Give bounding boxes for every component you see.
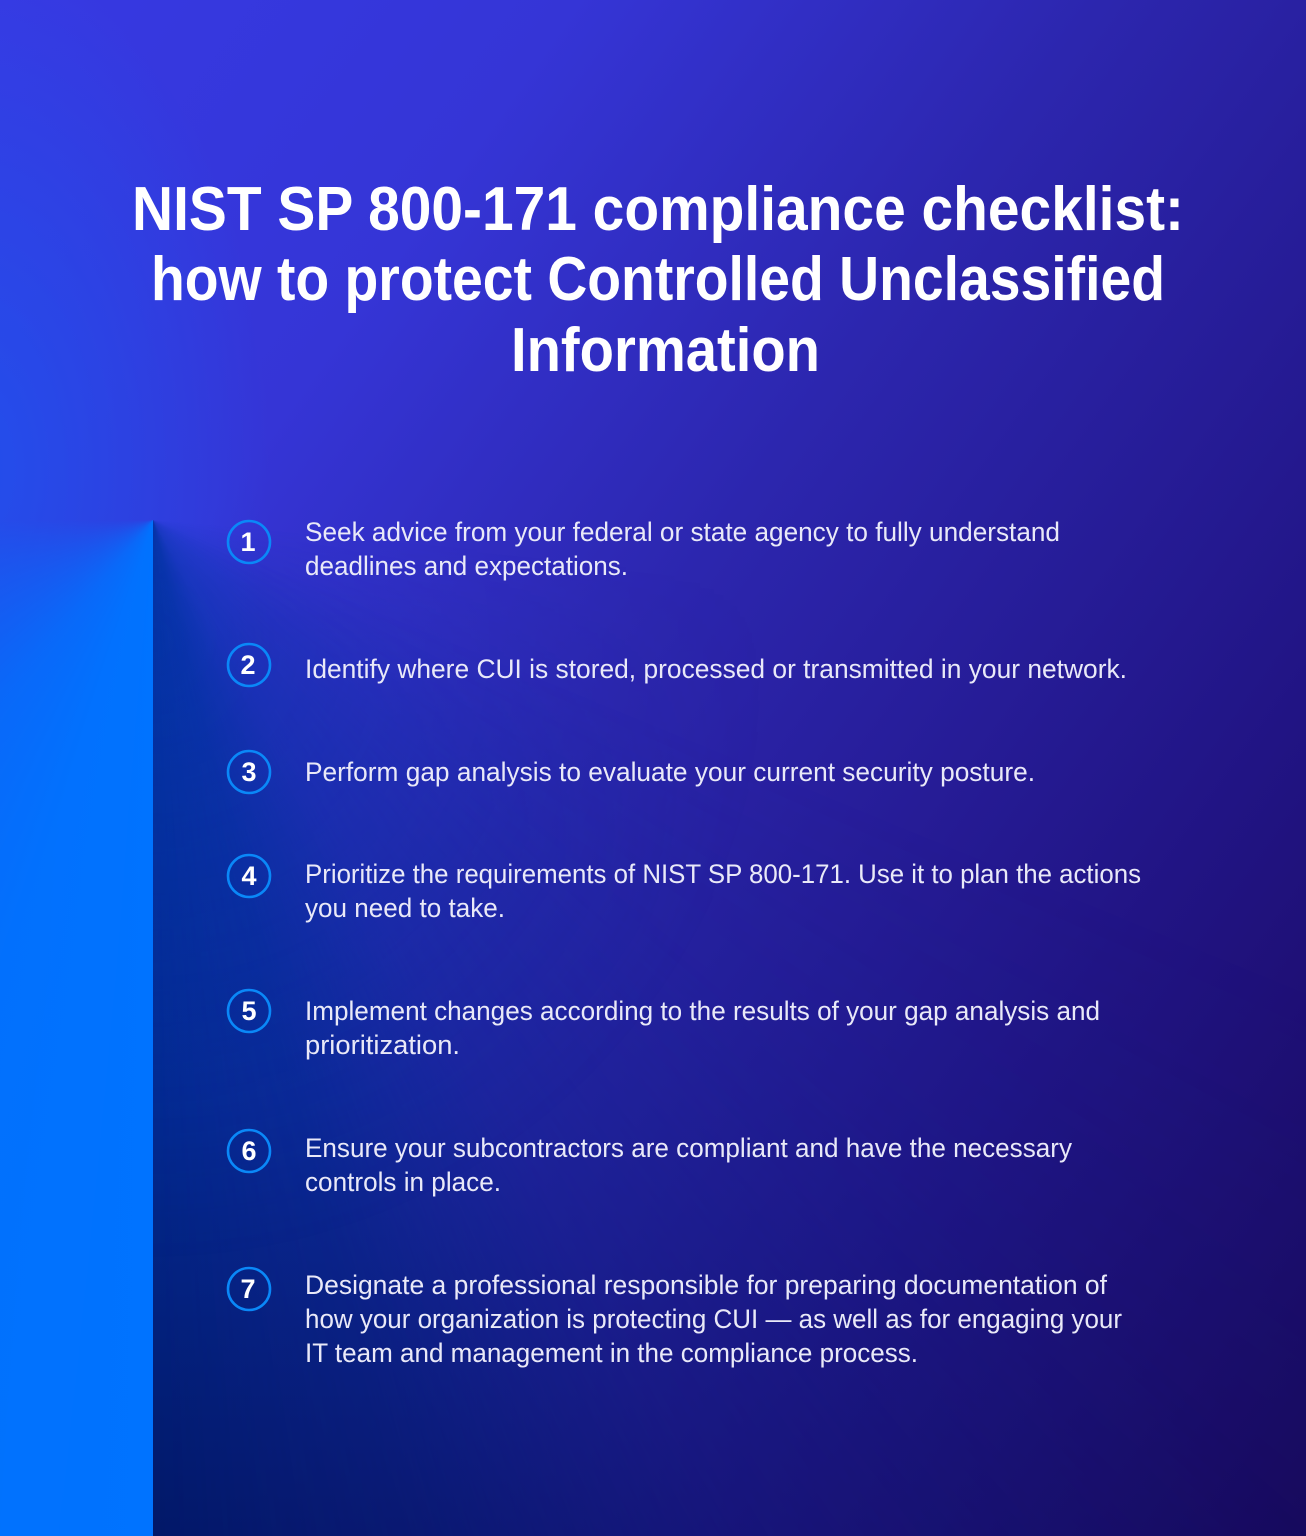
step 3: Perform gap analysis to evaluate your current security posture. xyxy=(305,757,1035,787)
step 6: Ensure your subcontractors are compliant and have the necessary xyxy=(305,1133,1073,1163)
step 2: 2 xyxy=(240,650,256,680)
step 4 xyxy=(228,855,1141,923)
step 4: Prioritize the requirements of NIST SP 800-171. Use it to plan the actions xyxy=(305,859,1141,889)
title: Information xyxy=(511,316,820,385)
step 3: 3 xyxy=(241,757,257,787)
step 7: IT team and management in the compliance process. xyxy=(305,1338,918,1368)
step 4: 4 xyxy=(241,861,257,891)
soft glow near the band corner xyxy=(153,520,368,720)
step 2: Identify where CUI is stored, processed or transmitted in your network. xyxy=(305,654,1127,684)
checklist xyxy=(228,517,1141,1368)
step 5: 5 xyxy=(241,996,257,1026)
step 7: 7 xyxy=(240,1274,256,1304)
step 7 xyxy=(228,1268,1122,1368)
step 1: deadlines and expectations. xyxy=(305,551,628,581)
title: NIST SP 800-171 compliance checklist: xyxy=(132,175,1184,244)
step 6 xyxy=(228,1130,1073,1197)
step 7: how your organization is protecting CUI — as well as for engaging your xyxy=(305,1304,1122,1334)
step 1 xyxy=(228,517,1060,581)
step 1: 1 xyxy=(240,527,256,557)
step 1: Seek advice from your federal or state agency to fully understand xyxy=(305,517,1060,547)
step 2 xyxy=(228,644,1127,686)
step 6: controls in place. xyxy=(305,1167,501,1197)
step 5 xyxy=(228,990,1100,1060)
title xyxy=(132,175,1184,385)
step 5: prioritization. xyxy=(305,1030,460,1060)
title: how to protect Controlled Unclassified xyxy=(151,245,1165,314)
step 4: you need to take. xyxy=(305,893,505,923)
light blue vertical band on the left xyxy=(0,520,153,1536)
step 5: Implement changes according to the results of your gap analysis and xyxy=(305,996,1100,1026)
step 7: Designate a professional responsible for preparing documentation of xyxy=(305,1270,1108,1300)
step 6: 6 xyxy=(241,1136,257,1166)
dark blue glow beside the band xyxy=(153,520,846,1536)
step 3 xyxy=(228,751,1035,793)
